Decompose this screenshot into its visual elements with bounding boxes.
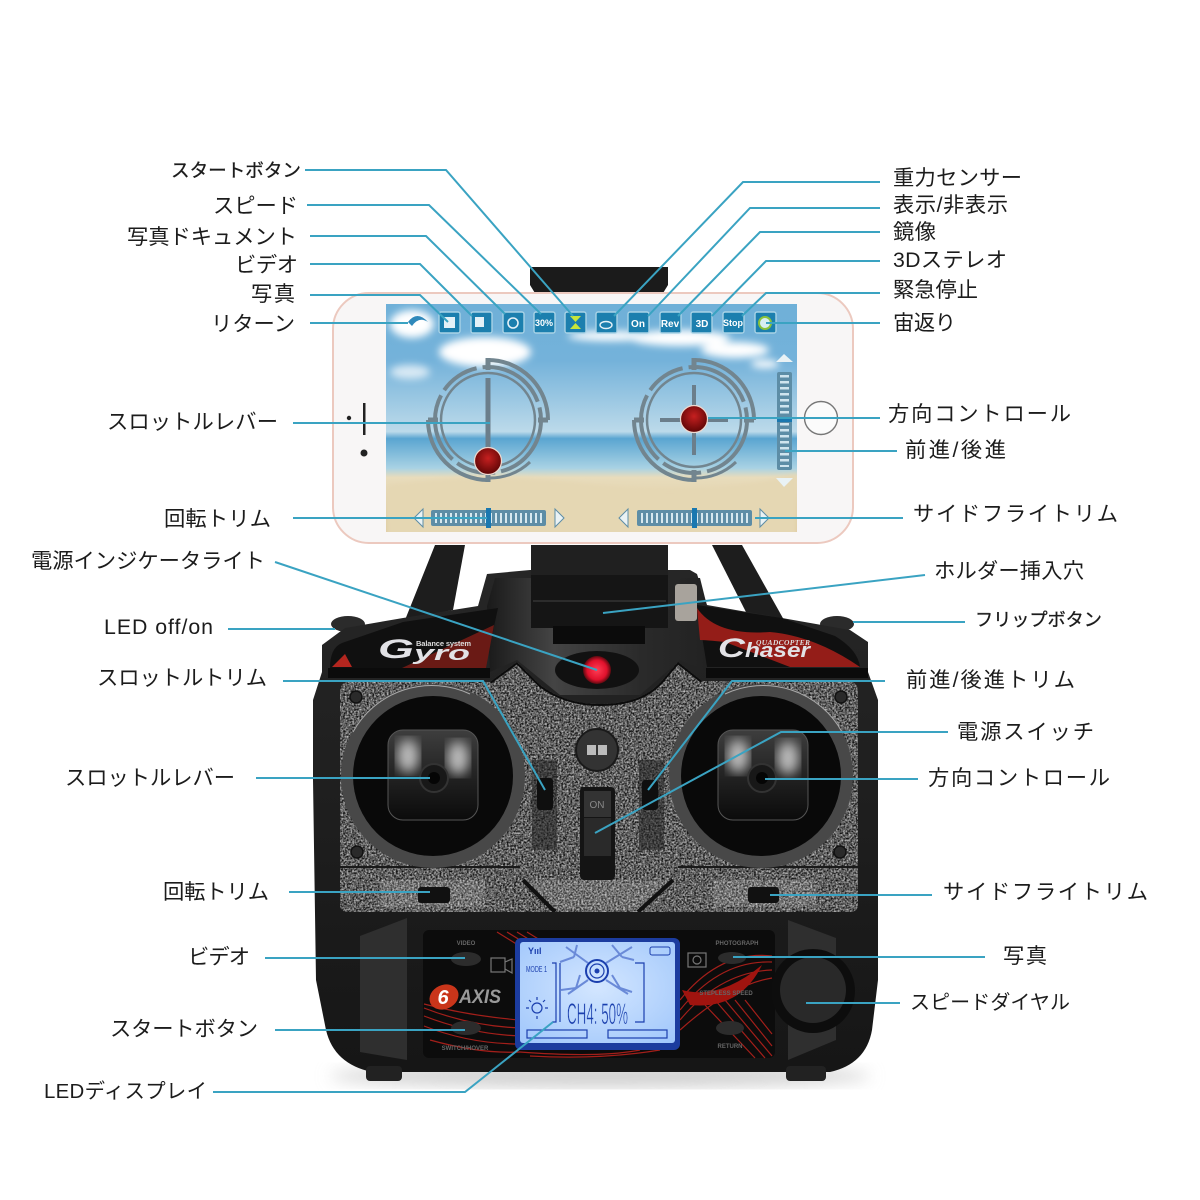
callout: rotation trim (app): 回転トリム (164, 507, 271, 531)
gray textured faceplate (330, 655, 870, 915)
wing: Chaser: haser (745, 640, 811, 662)
power switch (580, 787, 615, 880)
callout: gravity sensor (614, 166, 1022, 316)
callout: photo documents (127, 225, 505, 314)
callout: throttle lever (app): スロットルレバー (107, 410, 278, 434)
lower control panel: AXIS (458, 987, 501, 1008)
callout: speed (213, 194, 541, 314)
callout: show/hide: 表示/非表示 (893, 193, 1008, 217)
right joystick (669, 684, 853, 868)
lower control panel: 6 (437, 987, 449, 1009)
callout: LED display: LEDディスプレイ (44, 1080, 207, 1103)
callout: throttle lever: スロットルレバー (65, 766, 235, 790)
left joystick (341, 684, 525, 868)
speaker and camera (347, 403, 368, 456)
side grips (360, 918, 836, 1060)
callout: direction control (app): 方向コントロール (888, 402, 1071, 426)
lower control panel: PHOTOGRAPH (716, 941, 758, 947)
callout: photo (251, 282, 448, 322)
thumb screw (675, 584, 697, 621)
callouts left column (31, 160, 597, 1103)
lower control panel: SWITCH/HOVER (442, 1046, 489, 1052)
phone holder base (531, 545, 668, 644)
holder arms (405, 545, 784, 620)
speed dial (771, 949, 855, 1033)
toolbar icons: Rev (661, 319, 680, 330)
home button (804, 402, 838, 434)
floor shadow (330, 1065, 870, 1087)
controller body (313, 570, 878, 1072)
callout: photo: 写真 (251, 282, 295, 306)
LCD display: MODE 1 (526, 964, 547, 974)
power LED (555, 651, 639, 689)
center gauge (576, 729, 618, 771)
lower control panel (423, 930, 775, 1058)
toolbar icons: 30% (535, 318, 553, 328)
clamp top (530, 267, 668, 298)
LCD display (515, 938, 680, 1050)
callout: power indicator light (31, 549, 597, 670)
callout: throttle trim (97, 666, 545, 790)
app screen (386, 304, 797, 540)
callout: speed dial: スピードダイヤル (910, 991, 1070, 1014)
callout: LED display (44, 1022, 553, 1103)
feet (366, 1066, 826, 1081)
toolbar icons: On (631, 319, 645, 330)
LCD display: CH4: 50% (567, 998, 628, 1031)
callout: holder slot (603, 559, 1084, 613)
callout: power switch: 電源スイッチ (957, 720, 1094, 744)
callout: forward/back trim (648, 668, 1075, 790)
wing: Chaser (697, 605, 868, 678)
callout: rotation trim: 回転トリム (163, 880, 269, 904)
center shell (487, 578, 708, 695)
drone controller (313, 545, 878, 1087)
toolbar icons: 3D (696, 319, 708, 330)
callout: video: ビデオ (235, 253, 298, 277)
left touch ring (428, 358, 548, 482)
wing: Gyro: yro (412, 643, 470, 665)
callout: emergency stop (742, 278, 978, 316)
wing: Gyro (328, 608, 498, 678)
lower control panel: VIDEO (457, 941, 476, 947)
left trim slider (414, 508, 564, 528)
wing: Chaser: QUADCOPTER (756, 638, 810, 647)
left ball (474, 448, 502, 474)
top buttons (331, 616, 854, 632)
callout: throttle trim: スロットルトリム (97, 666, 267, 690)
wing: Gyro: Balance system (416, 639, 471, 648)
wing: Gyro: G (378, 634, 414, 664)
callout: video button: ビデオ (188, 945, 250, 969)
callout: video (235, 253, 472, 316)
callouts right column (595, 166, 1148, 1014)
callout: start button (controller): スタートボタン (110, 1017, 258, 1041)
rotation trim slider (418, 887, 450, 903)
callout: start button: スタートボタン (171, 160, 301, 181)
throttle trim switch (532, 760, 557, 850)
callout: flip: 宙返り (893, 311, 956, 335)
callout: power indicator light: 電源インジケータライト (31, 549, 265, 573)
callout: speed: スピード (213, 194, 298, 218)
phone body (333, 293, 853, 543)
phone with app screen (333, 267, 853, 543)
toolbar icons: Stop (723, 318, 743, 328)
callout: flip button: フリップボタン (975, 610, 1102, 630)
lower control panel: RETURN (718, 1044, 742, 1050)
callout: gravity sensor: 重力センサー (893, 166, 1022, 190)
callout: start button (171, 160, 573, 316)
right trim slider (619, 508, 769, 528)
callout: show/hide (648, 193, 1008, 316)
callout: 3D stereo: 3Dステレオ (893, 248, 1007, 272)
callout: forward/back (app): 前進/後進 (905, 438, 1006, 462)
side flight trim slider (748, 887, 779, 903)
lower control panel: STEPLESS SPEED (699, 991, 753, 997)
callout: side flight trim (app): サイドフライトリム (913, 502, 1118, 526)
right ball (680, 406, 708, 432)
callout: photo button: 写真 (1003, 944, 1047, 968)
callout: power switch (595, 720, 1094, 833)
callout: 3D stereo (712, 248, 1007, 316)
callout: LED off/on: LED off/on (104, 615, 213, 639)
callout: direction control: 方向コントロール (928, 766, 1110, 790)
callout: side flight trim: サイドフライトリム (943, 880, 1148, 904)
callout: mirror (678, 220, 936, 316)
callout: return: リターン (211, 312, 295, 336)
speed slider (776, 354, 793, 487)
callout: forward/back trim: 前進/後進トリム (906, 668, 1075, 692)
callout: holder slot: ホルダー挿入穴 (934, 559, 1084, 583)
toolbar icons (408, 312, 776, 333)
power switch: ON (590, 800, 604, 811)
forward trim switch (639, 760, 664, 850)
wing: Chaser: C (718, 633, 746, 663)
callout: mirror: 鏡像 (893, 220, 936, 244)
callout: photo documents: 写真ドキュメント (127, 225, 297, 249)
callout: emergency stop: 緊急停止 (893, 278, 978, 302)
right touch ring (634, 358, 754, 482)
screws (350, 691, 847, 858)
LCD display: Yııl (528, 946, 542, 956)
